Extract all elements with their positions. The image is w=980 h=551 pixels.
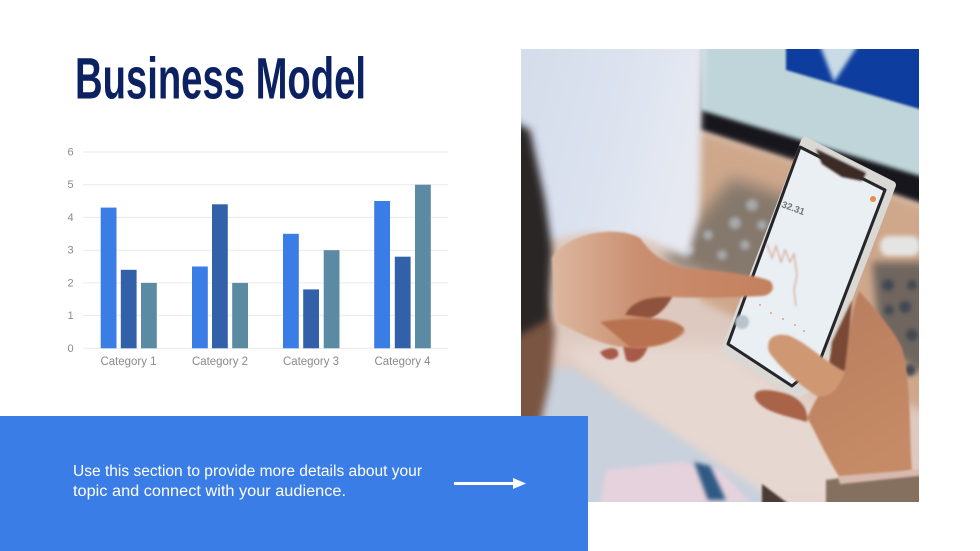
series 3 bars	[141, 185, 431, 348]
category labels	[100, 356, 431, 368]
body text: Use this section to provide more details about your	[73, 463, 422, 480]
lower desk	[568, 344, 838, 502]
bar chart	[67, 146, 448, 368]
keyboard	[662, 178, 940, 385]
y axis labels: 1	[67, 310, 74, 322]
arrow	[454, 478, 526, 489]
category labels: Category 1	[100, 356, 156, 368]
shirt	[540, 366, 762, 502]
body text: topic and connect with your audience.	[73, 483, 346, 500]
right sleeve cuff	[824, 469, 919, 502]
right hand holding phone	[755, 291, 912, 480]
series 2 bars	[121, 204, 411, 348]
text panel	[0, 416, 588, 551]
title: Business Model	[75, 46, 366, 112]
y axis labels: 3	[67, 245, 74, 257]
photo: hands holding phone with stock chart	[521, 49, 919, 502]
category labels: Category 2	[192, 356, 248, 368]
y axis labels: 4	[67, 212, 74, 224]
left hand pointing	[552, 232, 773, 362]
y axis labels	[67, 146, 74, 355]
phone screen value: 32.31	[780, 199, 807, 218]
desk	[700, 132, 940, 420]
body text	[73, 463, 422, 500]
y axis labels: 5	[67, 179, 74, 191]
category labels: Category 4	[374, 356, 431, 368]
y axis labels: 0	[67, 343, 74, 355]
person's hair and shoulder	[521, 300, 560, 416]
y axis labels: 6	[67, 146, 74, 158]
plaid shirt	[600, 462, 790, 506]
y axis labels: 2	[67, 277, 74, 289]
phone line chart	[767, 244, 797, 306]
monitor	[698, 49, 919, 206]
category labels: Category 3	[283, 356, 339, 368]
paper	[521, 49, 708, 262]
series 1 bars	[101, 201, 390, 348]
phone	[725, 141, 892, 394]
